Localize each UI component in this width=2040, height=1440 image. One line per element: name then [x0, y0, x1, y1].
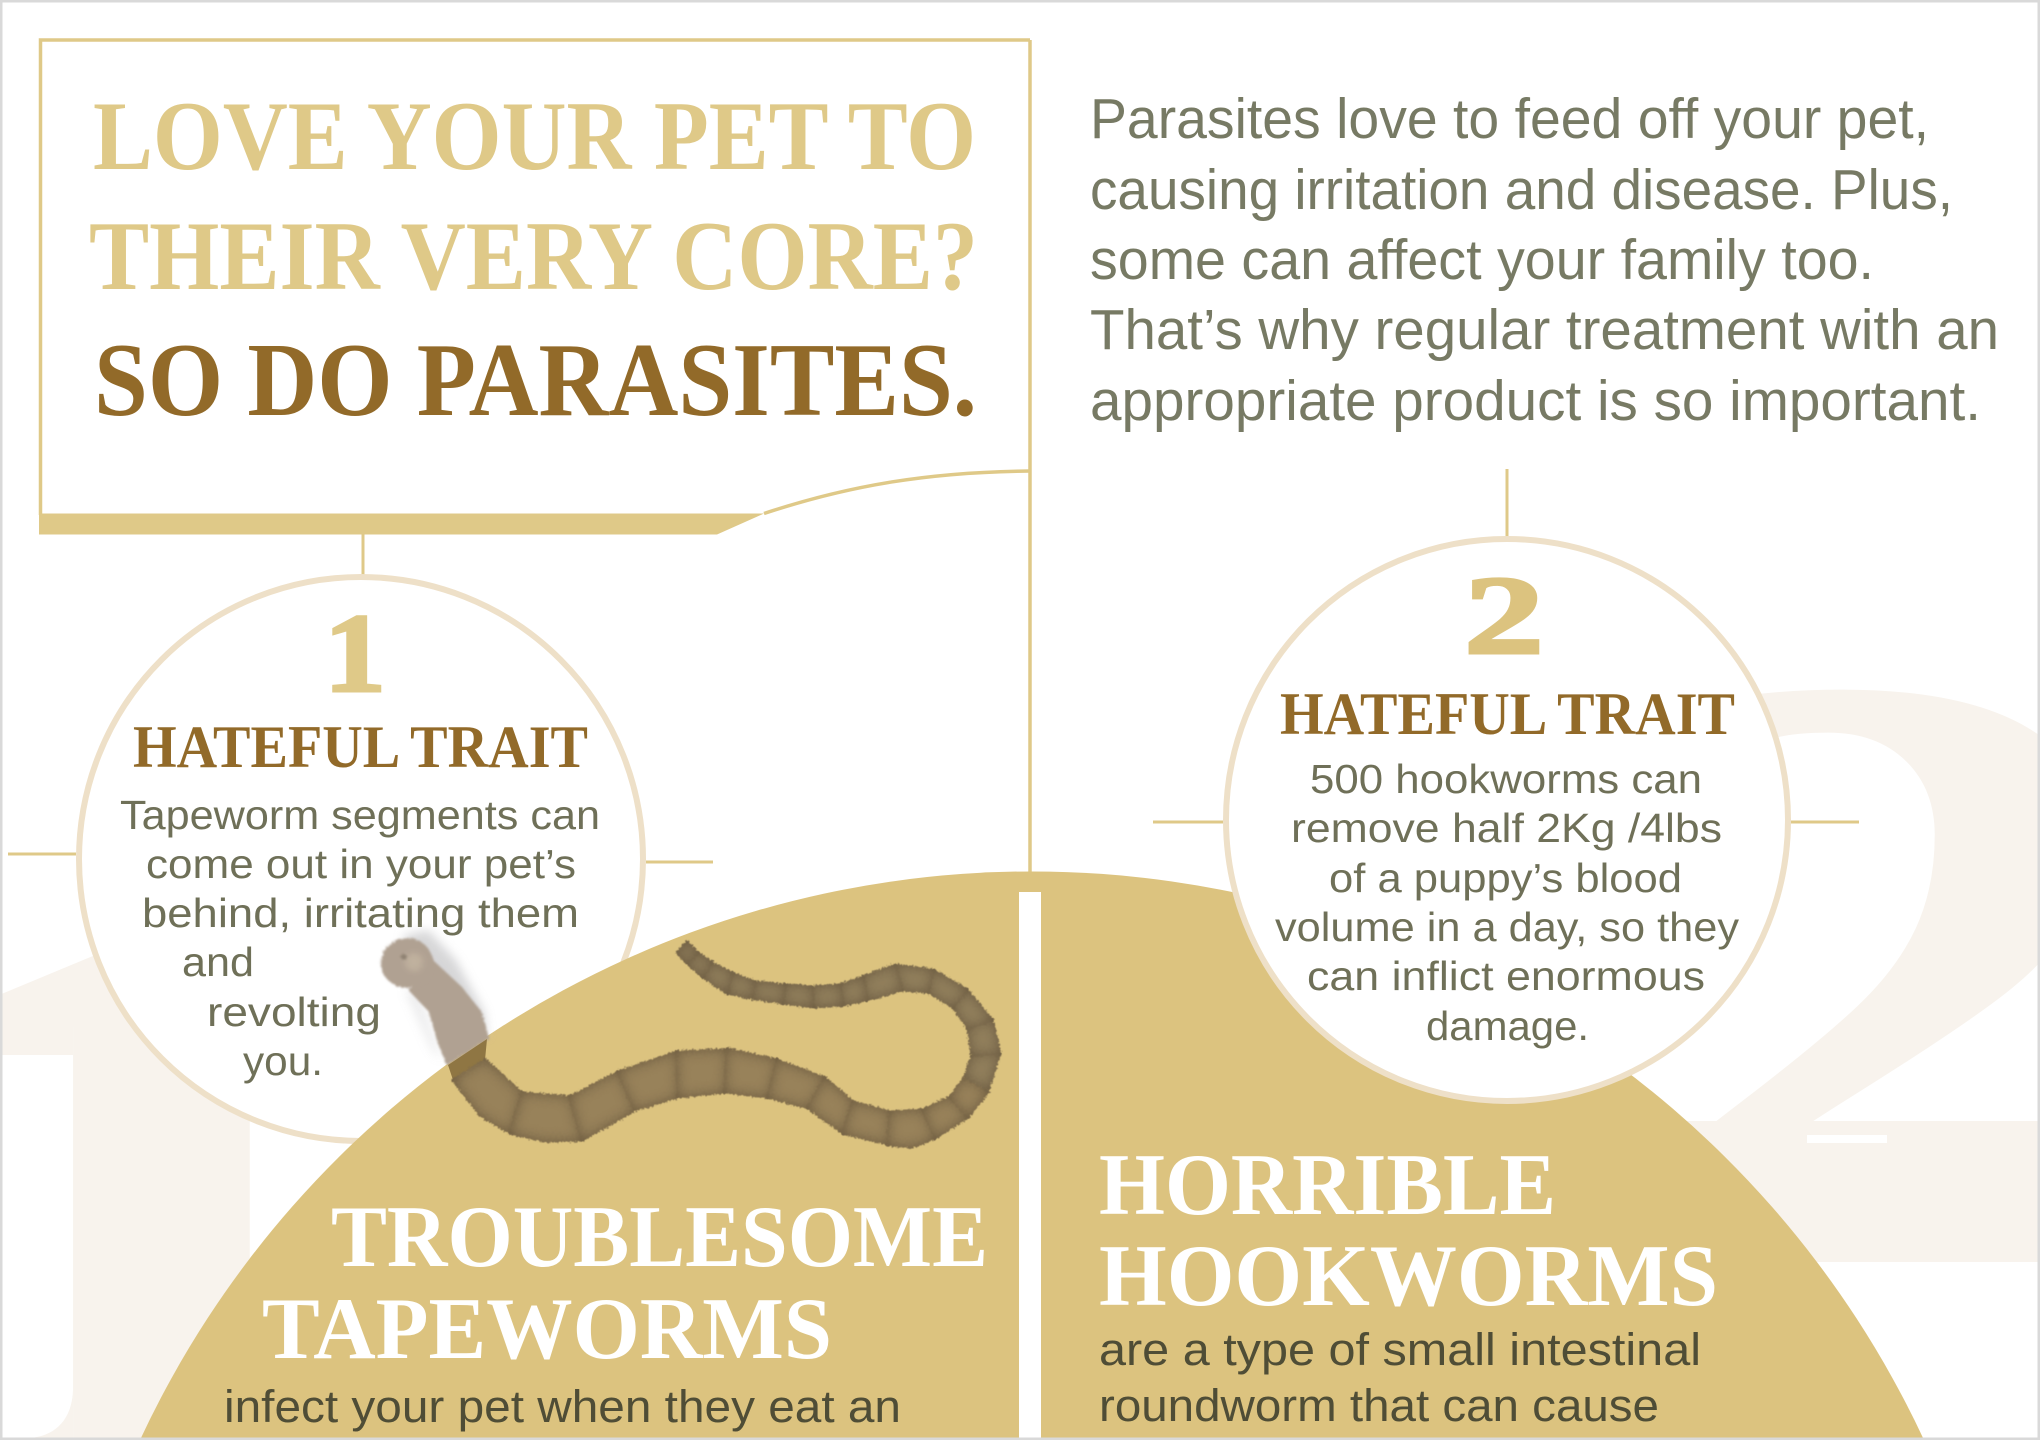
panel: hateful trait 1 circle [79, 577, 643, 1141]
intro paragraph: That’s why regular treatment with an [1090, 298, 1999, 362]
trait 1 number: 1 [324, 592, 386, 716]
numeral 2 base slit [1807, 1135, 1887, 1143]
trait 2 number: 2 [1464, 554, 1544, 678]
tapeworms heading: TAPEWORMS [262, 1281, 832, 1378]
title box frame [40, 40, 1030, 872]
trait 1 text [120, 792, 600, 1084]
intro paragraph: some can affect your family too. [1090, 228, 1874, 292]
trait 2 text: 500 hookworms can [1310, 756, 1702, 802]
trait 2 text [1275, 756, 1740, 1049]
hookworms heading [1099, 1137, 1718, 1325]
connector lines for trait 2 [1153, 469, 1859, 822]
trait 2 text: of a puppy’s blood [1329, 855, 1682, 901]
trait 1 heading: HATEFUL TRAIT [133, 714, 588, 780]
trait 2 heading: HATEFUL TRAIT [1280, 681, 1735, 747]
intro paragraph [1090, 87, 1999, 433]
hookworms text: roundworm that can cause [1099, 1380, 1659, 1431]
numeral 1 foot curve [30, 1390, 73, 1438]
trait 1 text: behind, irritating them [142, 890, 579, 936]
worm thin body segments [677, 942, 1000, 1090]
worm neck shadow [402, 930, 487, 1060]
numeral 2 base band [1680, 1121, 2040, 1262]
tapeworms heading: TROUBLESOME [331, 1189, 988, 1286]
trait 2 text: remove half 2Kg /4lbs [1291, 805, 1722, 851]
worm neck overlap segment [448, 1039, 487, 1080]
trait 1 text: you. [243, 1038, 323, 1084]
trait 2 text: damage. [1426, 1003, 1589, 1049]
panel: horrible hookworms text [1099, 1137, 1718, 1431]
worm thick body segments [453, 1049, 988, 1147]
hookworms text: are a type of small intestinal [1099, 1324, 1701, 1375]
hookworms heading: HOOKWORMS [1099, 1228, 1718, 1325]
hookworms heading: HORRIBLE [1099, 1137, 1556, 1234]
worm neck [411, 961, 487, 1063]
title box base bar [39, 514, 764, 534]
title: LOVE YOUR PET TO [93, 82, 976, 191]
trait 2 text: volume in a day, so they [1275, 904, 1740, 950]
trait 1 text: and [182, 939, 254, 985]
centre white divider [1019, 892, 1041, 1440]
intro paragraph: causing irritation and disease. Plus, [1090, 158, 1953, 222]
connector lines for trait 1 [8, 534, 713, 862]
title: THEIR VERY CORE? [89, 202, 978, 311]
trait 2 text: can inflict enormous [1307, 953, 1705, 999]
tapeworms heading [262, 1189, 988, 1378]
dome background [140, 871, 1924, 1440]
worm head [381, 938, 433, 988]
icon: tapeworm [381, 930, 1000, 1147]
title [89, 82, 978, 438]
trait 1 text: Tapeworm segments can [120, 792, 600, 838]
panel: hateful trait 2 circle [1226, 539, 1788, 1101]
trait 1 text: revolting [207, 989, 381, 1035]
trait 1 text: come out in your pet’s [146, 841, 576, 887]
title: SO DO PARASITES. [94, 321, 977, 438]
intro paragraph: appropriate product is so important. [1090, 369, 1981, 433]
intro paragraph: Parasites love to feed off your pet, [1090, 87, 1929, 151]
numeral 1 flag band [0, 1010, 73, 1055]
panel: troublesome tapeworms text [224, 1189, 988, 1432]
hookworms text [1099, 1324, 1701, 1431]
tapeworms text: infect your pet when they eat an [224, 1381, 901, 1432]
